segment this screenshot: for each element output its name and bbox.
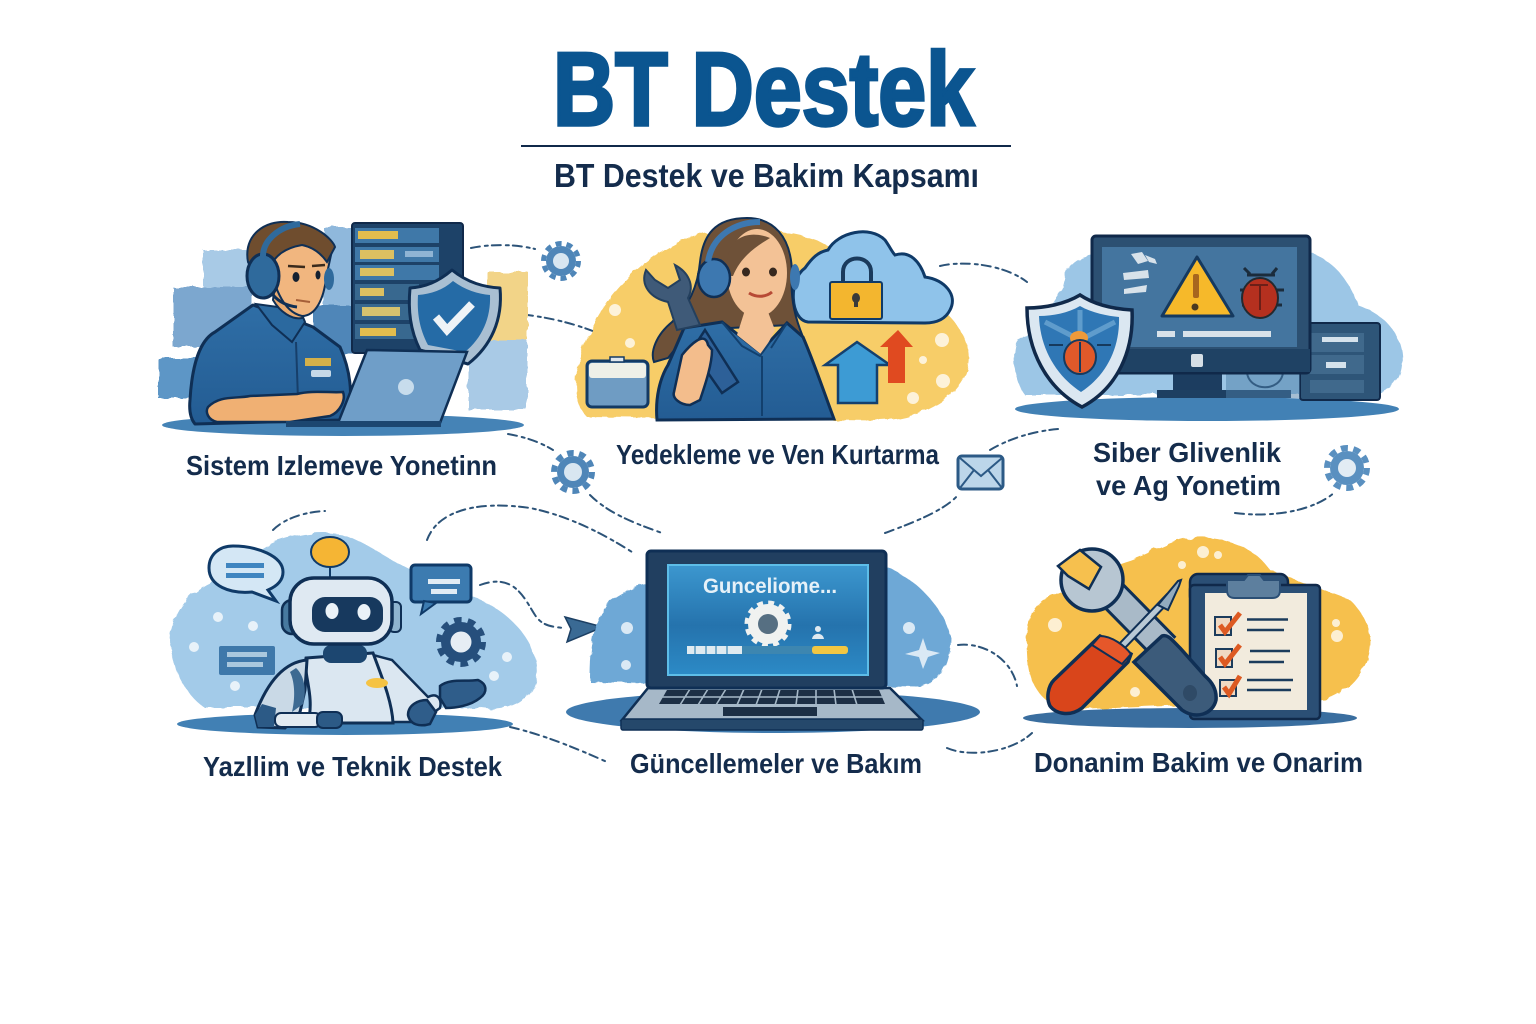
gear [439,620,483,664]
cloud with padlock [793,232,952,323]
right arm [373,655,440,722]
woman technician [644,218,834,420]
laptop [286,350,467,427]
laptop base [621,688,923,730]
panel: software support [170,533,537,735]
flecks [621,622,940,670]
clipboard [1190,574,1320,719]
blue blob [590,565,950,687]
progress bar [687,646,848,654]
right hand [408,700,436,725]
speech bubble [209,546,283,601]
robot [255,537,485,728]
label: cyber security: ve Ag Yonetim [1096,470,1281,501]
monitor [1092,236,1310,373]
wrench [1058,549,1216,715]
blue blob [1014,250,1402,395]
flecks [609,304,950,404]
wrench [644,265,700,330]
title: BT Destek [553,32,974,148]
icon: arrow [565,617,603,642]
label: updates and maintenance: Güncellemeler ve Bakım [630,748,922,779]
laptop screen [647,551,886,688]
connector lines [273,245,1335,762]
bug [1240,268,1284,318]
ground shadow [177,713,513,735]
label: backup and recovery: Yedekleme ve Ven Kurtarma [616,439,939,470]
checklist [1215,613,1293,696]
info card [219,646,275,675]
PC tower [1300,323,1380,400]
label: cyber security [1093,437,1281,501]
flecks [189,612,512,691]
flecks [1048,546,1343,697]
label: hardware repair: Donanim Bakim ve Onarim [1034,747,1363,778]
panel: cyber security [1014,236,1402,421]
background blocks [158,227,528,410]
blue blob [170,533,537,709]
message bubble [411,565,471,614]
icon: gear middle [554,453,592,491]
screwdriver [1048,580,1181,714]
icon: gear top left [544,244,578,278]
subtitle: BT Destek ve Bakim Kapsamı [554,157,979,194]
yellow blob [576,229,969,420]
icon: envelope [958,456,1003,489]
ground shadow [566,691,980,733]
label: system monitoring: Sistem Izlemeve Yonetinn [186,450,497,481]
person glyph [812,626,824,639]
upload arrows [825,330,913,403]
panel: updates and maintenance [566,551,980,733]
server rack [352,223,463,353]
torso [306,653,393,723]
left arm [255,660,307,728]
briefcase [587,357,648,407]
panel: backup and recovery [576,218,969,420]
ground shadow [162,414,524,436]
yellow blob [1027,537,1370,710]
label: cyber security: Siber Glivenlik [1093,437,1281,468]
shirt [657,322,834,420]
ground shadow [1015,397,1399,421]
panel: hardware repair [1023,537,1370,728]
screen heading: Gunceliome... [703,575,837,598]
label: software support: Yazllim ve Teknik Destek [203,751,502,782]
technician [190,222,351,424]
ground shadow [1023,708,1357,728]
stand [1157,373,1300,398]
icon: gear right [1327,448,1367,488]
warning triangle [1162,257,1233,316]
screen gear [746,602,790,646]
shield with check [409,270,500,364]
panel: system monitoring [158,222,528,436]
shield with bug [1027,295,1132,407]
